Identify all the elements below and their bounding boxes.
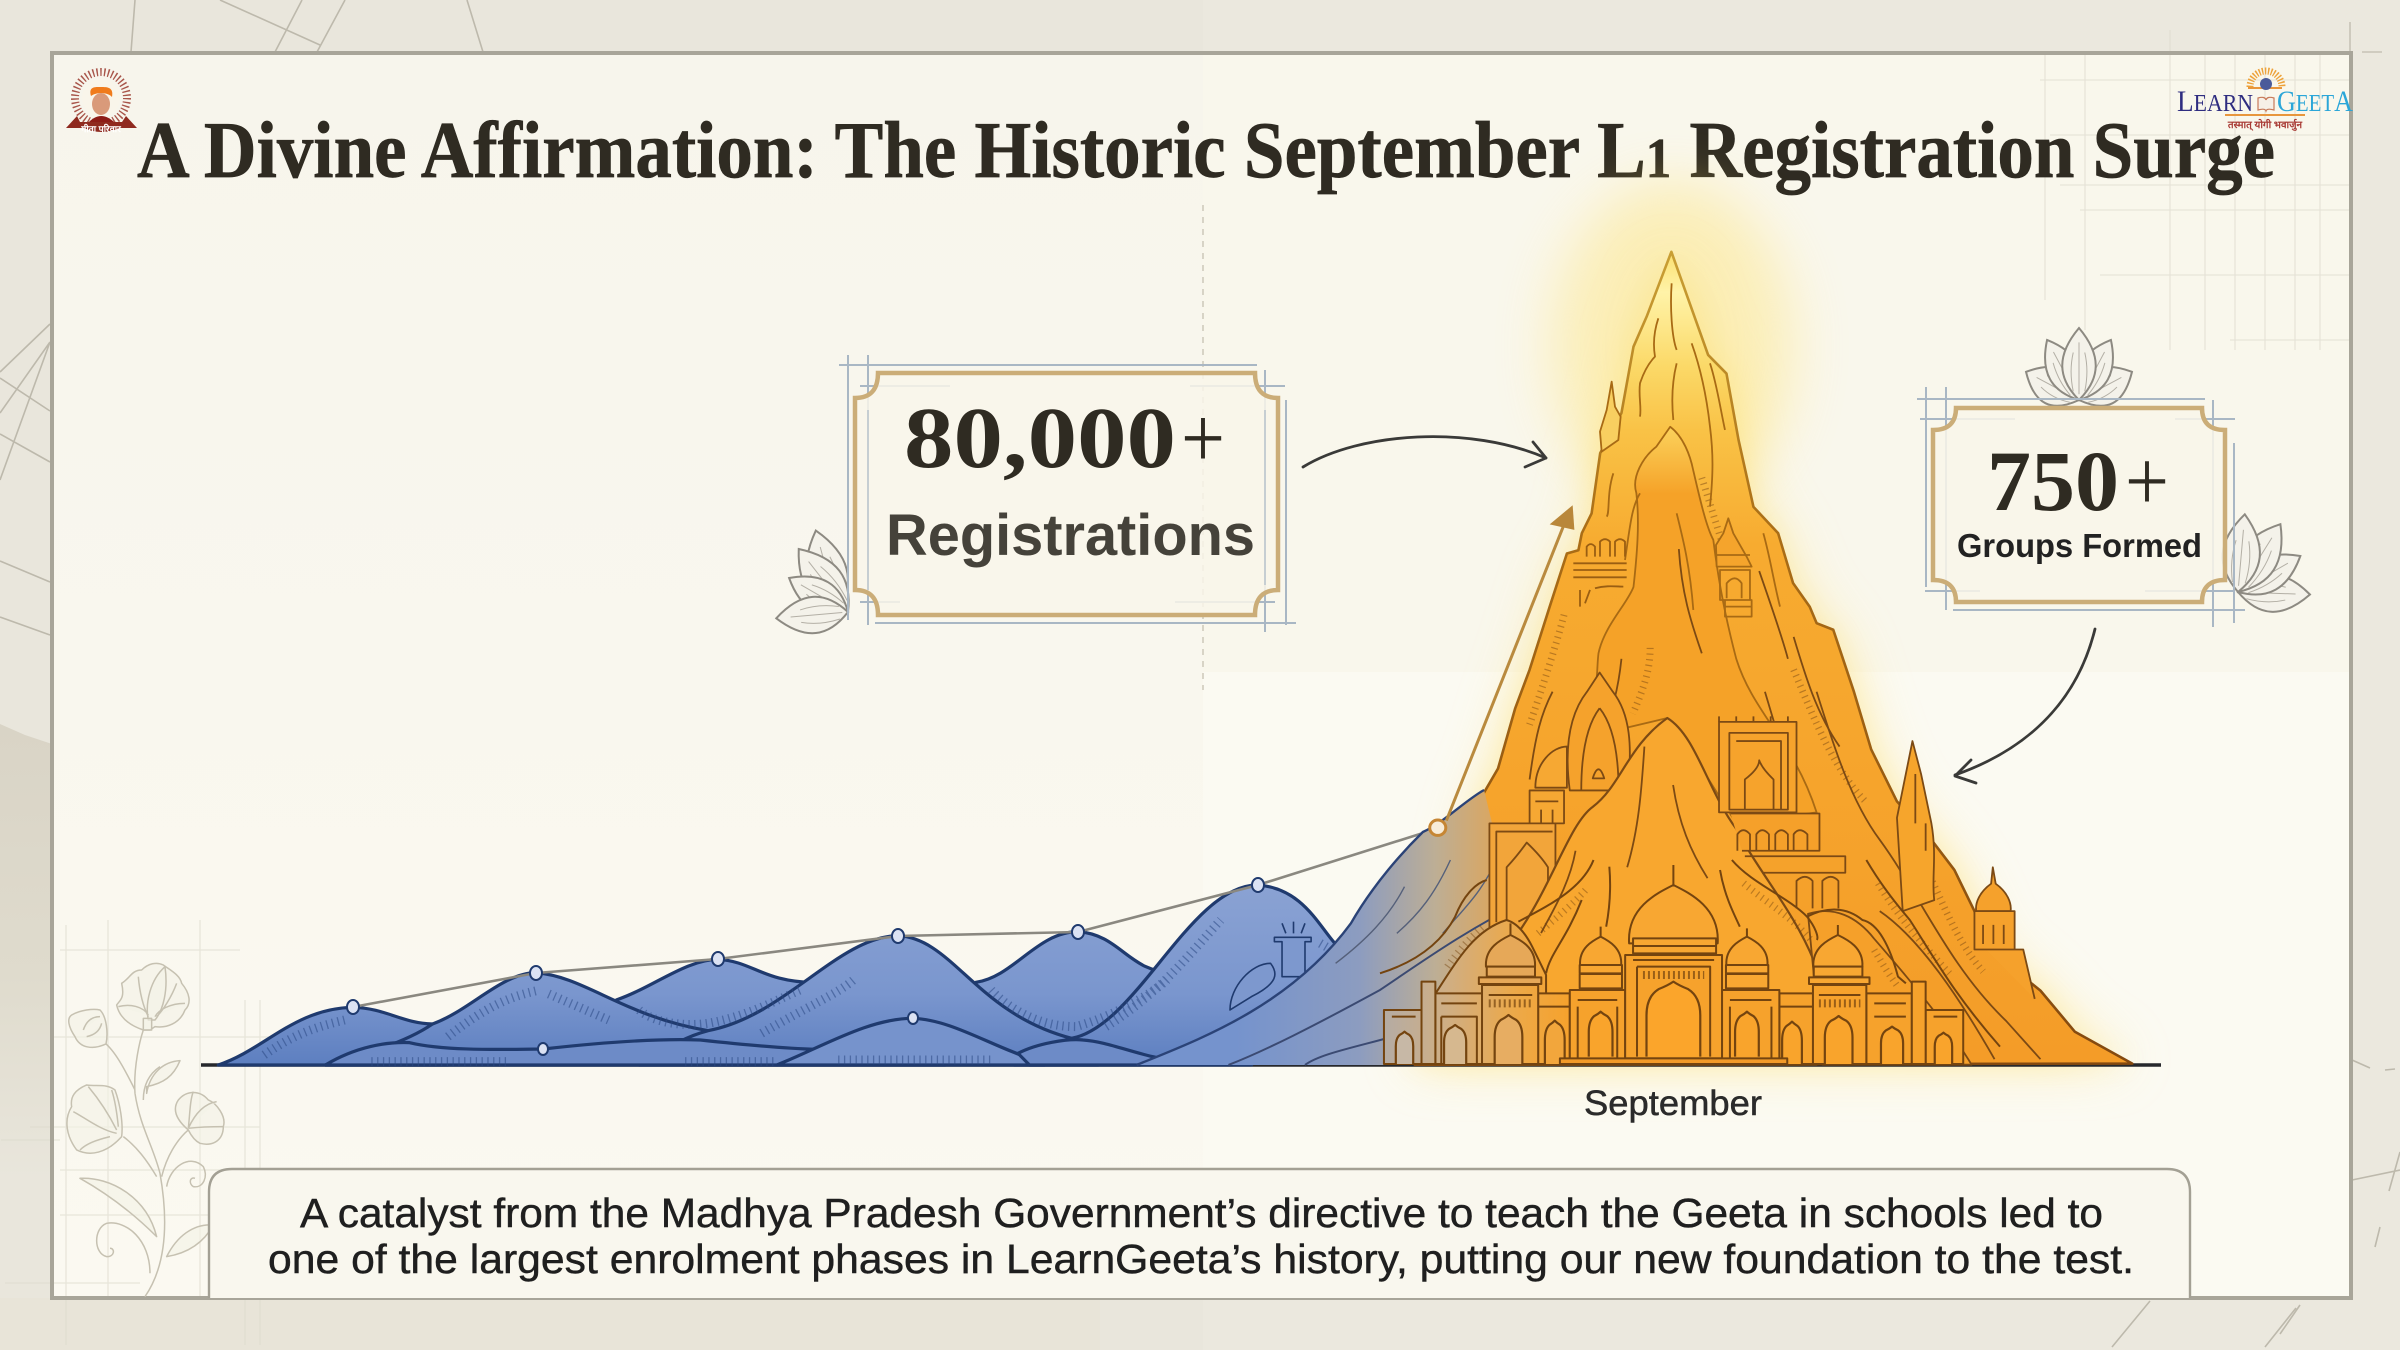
stat number: 750	[1987, 433, 2119, 529]
caption text line 1: A catalyst from the Madhya Pradesh Government’s directive to teach the Geeta in schools led to	[300, 1190, 2103, 1236]
stat label: Registrations	[886, 503, 1255, 568]
tan foothill	[1431, 920, 1546, 1000]
icon: shikhara temple	[1568, 673, 1630, 790]
caption text line 2: one of the largest enrolment phases in LearnGeeta’s history, putting our new foundation to the test.	[268, 1236, 2134, 1282]
icon: upper ruined hall	[1573, 539, 1627, 607]
transition ridges blue to gold	[1137, 790, 1558, 1065]
palace at mountain base	[1380, 860, 2000, 1064]
logo: LearnGeeta: तस्मात् योगी भवार्जुन	[2227, 118, 2303, 131]
callout arrow to mountain	[1303, 437, 1546, 467]
floral sketch	[67, 963, 224, 1297]
logo: LearnGeeta	[2177, 71, 2353, 131]
palace domes	[1479, 923, 1541, 984]
icon: right spire	[1897, 741, 1934, 911]
logo: LearnGeeta: LEARN	[2177, 85, 2253, 118]
foreground gold peak	[1501, 718, 1817, 1065]
logo: LearnGeeta: GEETA	[2277, 85, 2353, 118]
x-axis label: September	[1584, 1084, 1762, 1123]
mountain glow	[1415, 182, 2132, 1065]
stat label: Groups Formed	[1957, 527, 2202, 564]
icon: lotus above groups box	[2017, 328, 2141, 416]
chart: September golden mountain	[1415, 252, 2132, 1065]
icon: right palace gate	[1719, 722, 1797, 812]
callout: 750+ groups formed	[1917, 387, 2245, 627]
logo: Geeta Parivar emblem: गीता परिवार	[80, 123, 121, 134]
stat number: +	[1181, 389, 1225, 486]
right mid ridge	[1808, 911, 1972, 1065]
icon: arcade	[1730, 813, 1819, 851]
stat number: +	[2125, 433, 2169, 529]
central orange column	[1570, 427, 1817, 823]
trend line with monthly nodes	[347, 828, 1439, 1055]
baseline axis	[201, 1063, 2161, 1067]
mountain summit line work	[1573, 283, 1780, 617]
icon: right small temple	[1976, 867, 2011, 911]
stat number: 80,000	[904, 389, 1176, 486]
icon: left gate	[1489, 823, 1555, 933]
icon: upper right tower	[1716, 518, 1752, 567]
icon: lotus right of groups box	[2219, 513, 2311, 613]
logo: Geeta Parivar emblem	[66, 72, 137, 134]
icon: small blue pillar shrine	[1230, 922, 1311, 1010]
palace arches	[1396, 982, 1952, 1064]
icon: lotus left of registrations box	[775, 525, 863, 636]
caption panel	[209, 1169, 2190, 1298]
chart: blue monthly hills	[218, 885, 1343, 1065]
title: A Divine Affirmation: The Historic September L1 Registration Surge	[137, 107, 2275, 195]
palace walls	[1384, 993, 1963, 1064]
gold surge arrow with node	[1430, 505, 1574, 835]
mountain line work: temples and ridges	[1489, 427, 2040, 1065]
icon: spire tower	[1600, 382, 1621, 452]
callout: 80,000+ registrations	[839, 355, 1296, 632]
callout arrow from groups box	[1955, 629, 2095, 783]
